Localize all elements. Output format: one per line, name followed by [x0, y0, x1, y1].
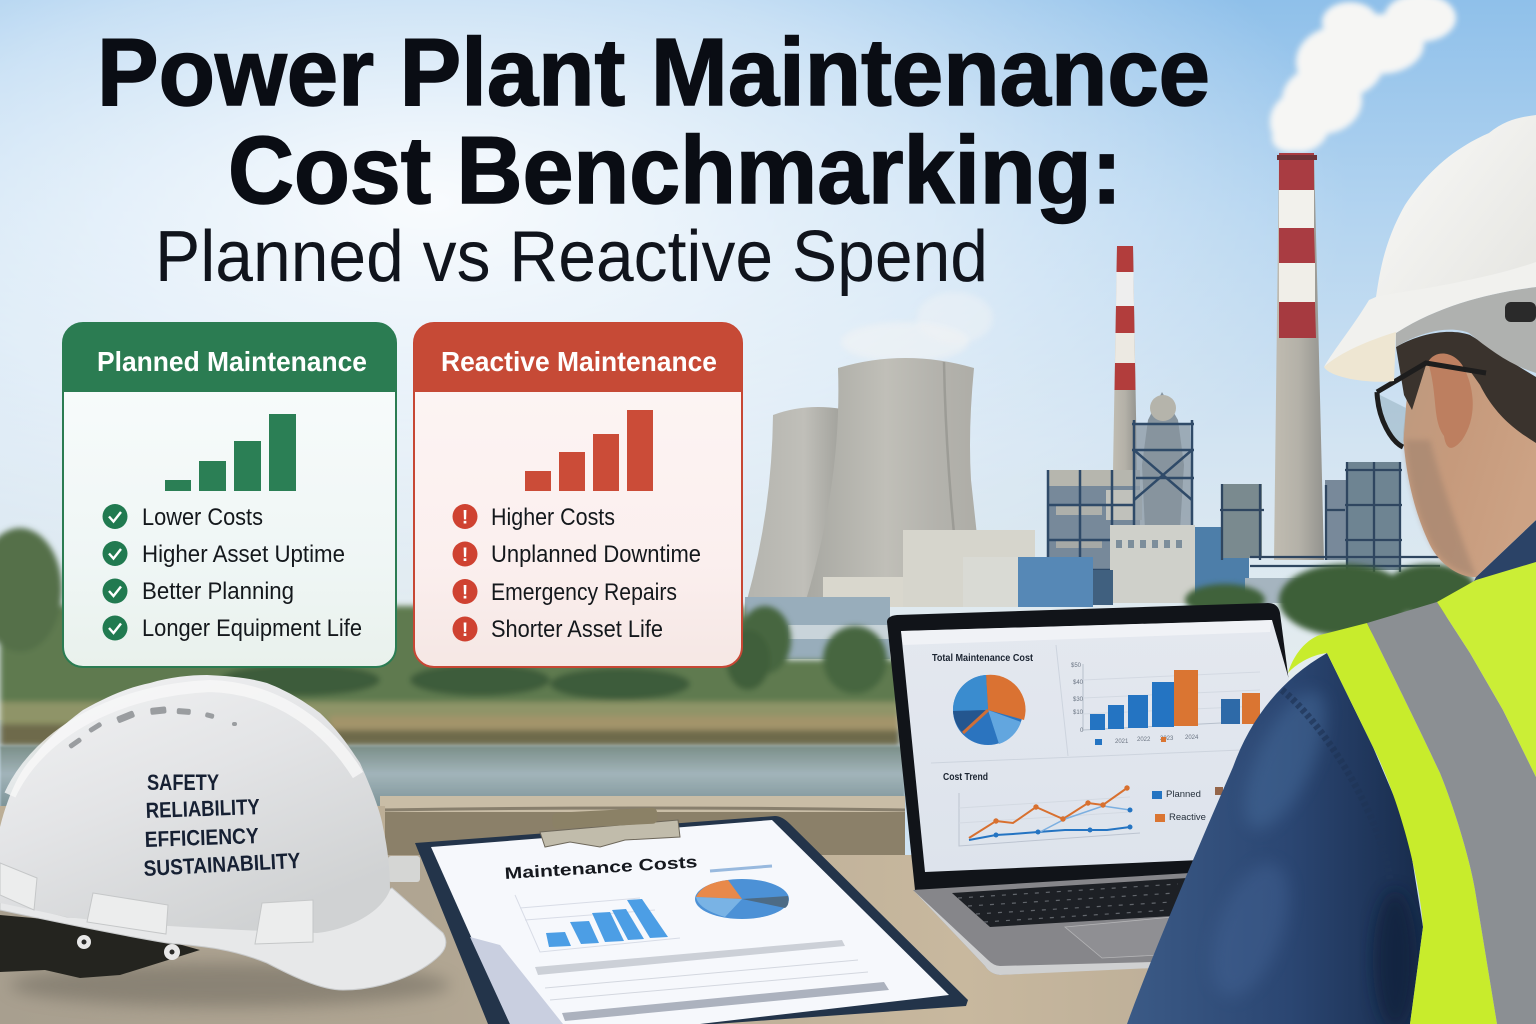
industrial boiler structure [745, 392, 1440, 659]
main title [97, 19, 1210, 224]
helmet text: SAFETY [147, 770, 219, 795]
laptop bar chart [1071, 663, 1260, 745]
reactive risk list: Unplanned Downtime [491, 541, 701, 568]
brim [0, 888, 446, 990]
laptop legend: Reactive [1169, 812, 1206, 823]
laptop bar chart: 2023 [1160, 736, 1174, 742]
harness [0, 915, 200, 978]
main title: Power Plant Maintenance [97, 19, 1210, 126]
planned header [63, 323, 396, 392]
laptop trend heading: Cost Trend [943, 771, 988, 783]
red and white chimney, tall [1274, 153, 1324, 560]
hat liner [1396, 287, 1536, 373]
planned benefit list [102, 504, 362, 642]
glasses [1376, 363, 1486, 447]
engineer hard hat [1324, 115, 1536, 382]
red and white chimney, small [1113, 246, 1137, 470]
white hard hat [0, 675, 446, 990]
planned bar chart [165, 414, 296, 491]
laptop bar chart: $30 [1073, 697, 1084, 703]
clips [77, 935, 180, 960]
main title: Cost Benchmarking: [228, 117, 1122, 224]
planned benefit list: Lower Costs [142, 504, 263, 531]
shirt [1127, 653, 1423, 1024]
reactive risk list: ! [462, 545, 468, 566]
reactive bar chart [525, 410, 653, 491]
collar [1470, 520, 1536, 590]
treeline and far bank [0, 528, 1476, 746]
clipboard metal clip [540, 808, 680, 847]
subtitle: Planned vs Reactive Spend [155, 217, 988, 297]
ear [1428, 353, 1473, 448]
planned benefit list: Higher Asset Uptime [142, 541, 345, 568]
cooling towers [747, 358, 984, 600]
helmet text [143, 770, 301, 881]
reactive risk list: ! [462, 508, 468, 528]
reactive heading: Reactive Maintenance [441, 346, 717, 377]
reactive risk list: Higher Costs [491, 504, 615, 531]
panel: planned maintenance [63, 323, 396, 667]
planned benefit list: Better Planning [142, 578, 294, 605]
laptop screen [901, 620, 1292, 872]
reactive header [414, 323, 742, 392]
laptop bar chart: $50 [1071, 663, 1082, 669]
clipboard [415, 808, 968, 1024]
report heading: Maintenance Costs [504, 853, 698, 883]
tabs [0, 863, 313, 944]
report table [535, 940, 889, 1021]
laptop legend: Planned [1166, 789, 1201, 800]
sky background [0, 0, 1536, 720]
laptop [887, 603, 1292, 975]
laptop legend [1152, 787, 1223, 823]
laptop pie heading: Total Maintenance Cost [932, 652, 1033, 664]
laptop bar chart: 2024 [1185, 735, 1199, 741]
planned benefit list: Longer Equipment Life [142, 615, 362, 642]
laptop bar chart: $10 [1073, 710, 1084, 716]
laptop bar chart: $40 [1073, 680, 1084, 686]
laptop bar chart: 2022 [1137, 737, 1151, 743]
hi-vis vest [1288, 562, 1536, 1024]
laptop bar chart: 2021 [1115, 739, 1129, 745]
reactive risk list: Shorter Asset Life [491, 616, 663, 643]
dome [0, 675, 390, 933]
report pie chart [695, 879, 789, 919]
laptop bar chart: 0 [1080, 728, 1084, 734]
panel: reactive maintenance [414, 323, 742, 667]
helmet text: RELIABILITY [145, 794, 260, 823]
concrete wall and ledge [0, 796, 1200, 1024]
river [0, 746, 905, 808]
engineer with hard hat and hi-vis vest [1127, 115, 1536, 1024]
hair [1396, 332, 1536, 443]
steam plumes [841, 0, 1456, 362]
planned heading: Planned Maintenance [97, 346, 367, 377]
report bar chart [515, 895, 680, 952]
laptop pie chart [953, 675, 1026, 745]
reactive risk list [452, 504, 701, 643]
helmet text: EFFICIENCY [144, 823, 259, 852]
reactive risk list: ! [462, 582, 468, 604]
laptop trend chart [959, 785, 1140, 846]
reactive risk list: ! [462, 620, 468, 641]
reactive risk list: Emergency Repairs [491, 579, 677, 606]
vents [68, 706, 237, 749]
neck and head [1403, 340, 1536, 577]
helmet text: SUSTAINABILITY [143, 848, 301, 881]
